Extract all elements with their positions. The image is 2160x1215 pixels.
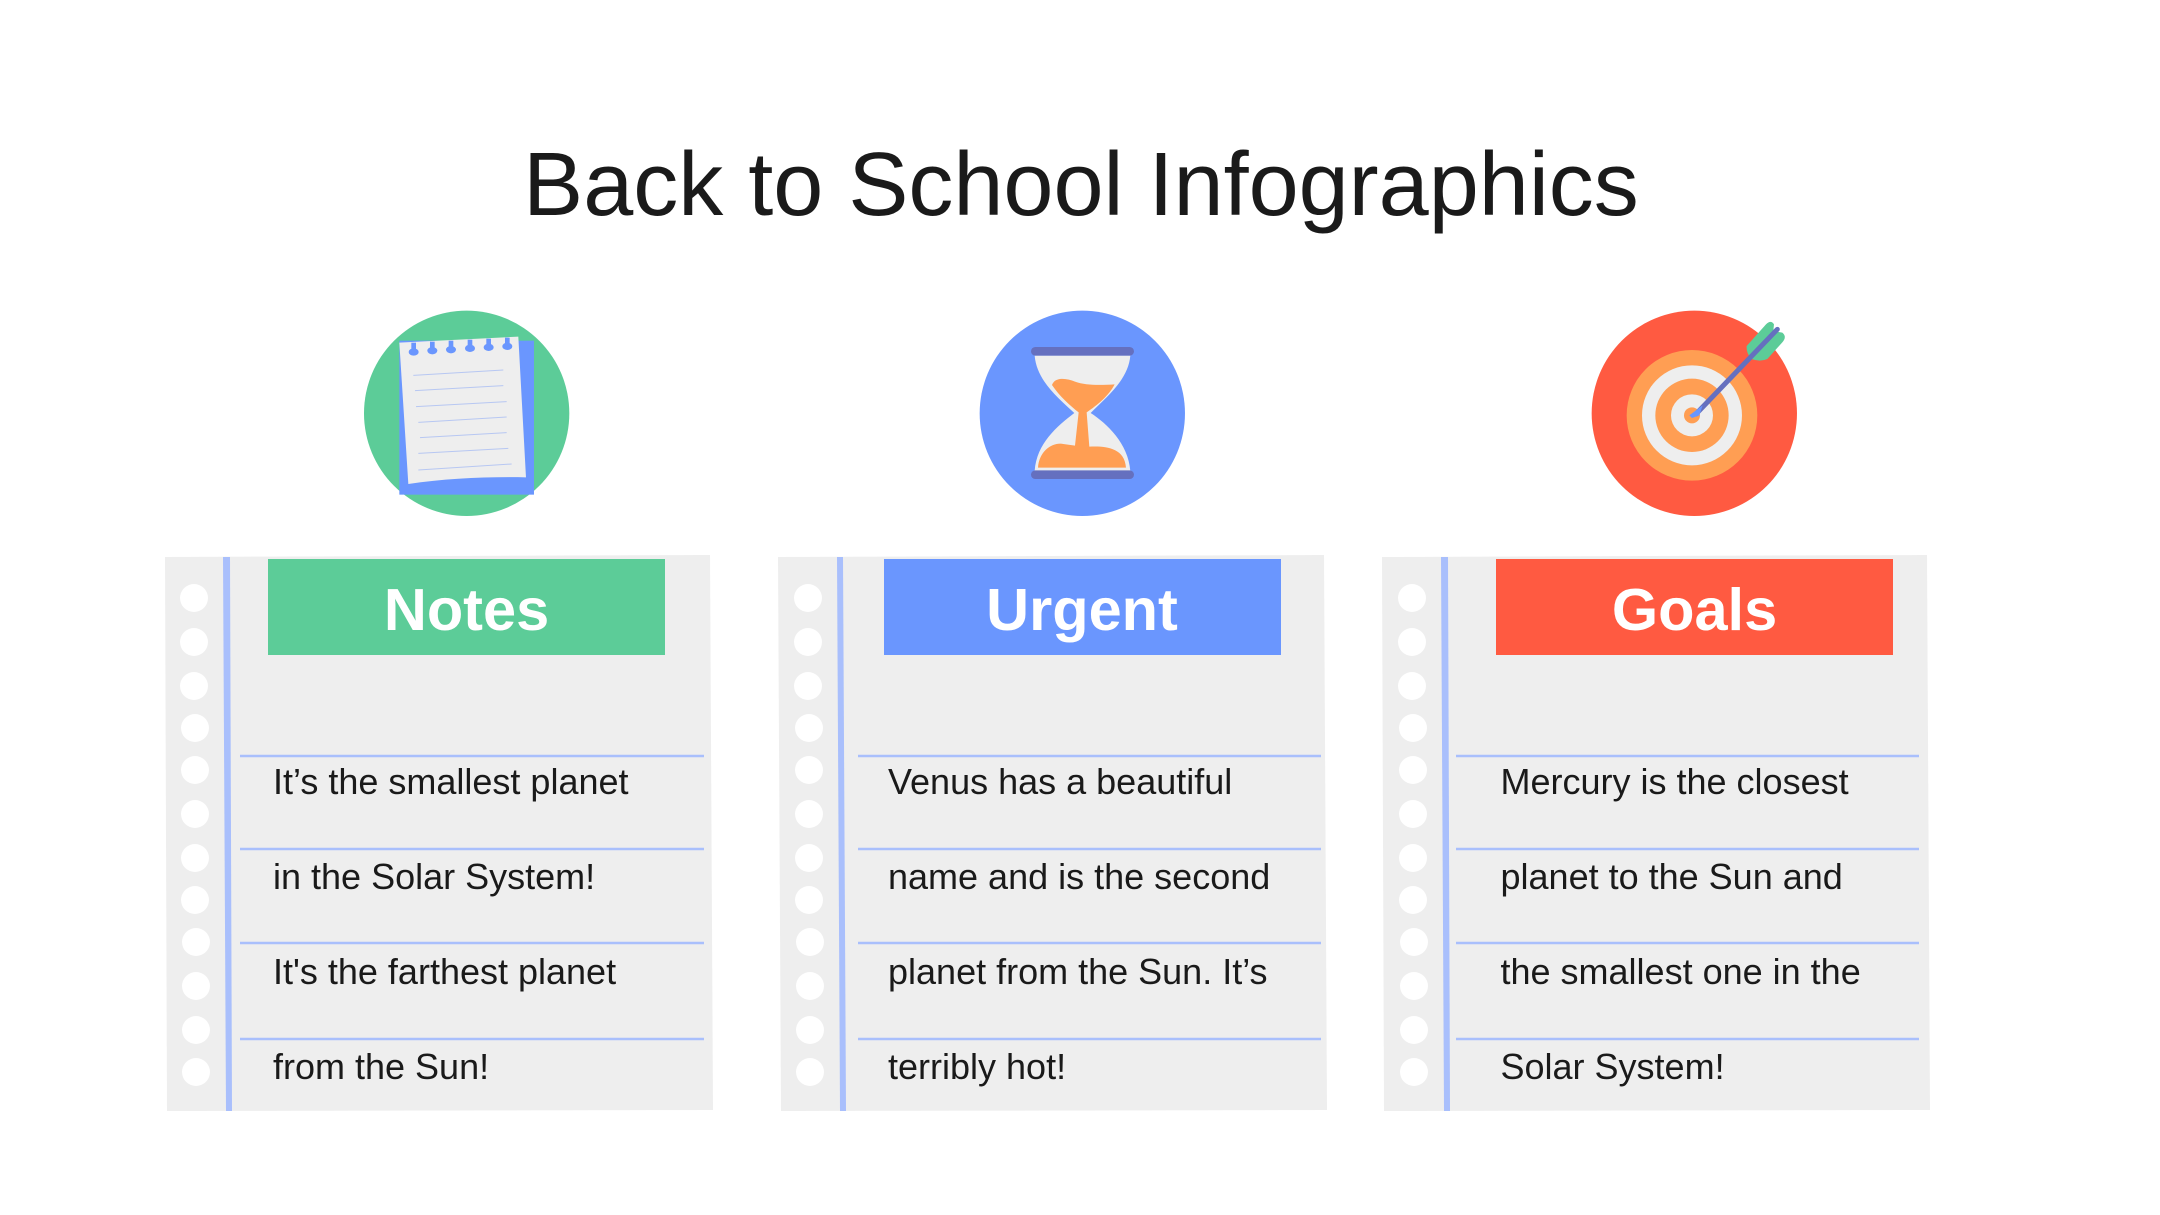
- text: goals body: Mercury is the closest: [1500, 761, 1849, 802]
- text: goals body: the smallest one in the: [1500, 951, 1861, 992]
- notebook paper: [778, 555, 1327, 1111]
- text: goals body: Solar System!: [1500, 1046, 1725, 1087]
- text: goals body: planet to the Sun and: [1500, 856, 1843, 897]
- text: urgent body: planet from the Sun. It’s: [888, 951, 1268, 992]
- text: notes body: It's the farthest planet: [273, 951, 616, 992]
- notebook paper: [1382, 555, 1930, 1111]
- notebook paper: [165, 555, 713, 1111]
- heading: urgent: Urgent: [986, 576, 1178, 643]
- icon: hourglass: [980, 311, 1185, 516]
- panel: goals: [1382, 311, 1930, 1111]
- text: urgent body: name and is the second: [888, 856, 1270, 897]
- text: notes body: It’s the smallest planet: [273, 761, 629, 802]
- icon: notepad: [364, 311, 569, 516]
- text: urgent body: Venus has a beautiful: [888, 761, 1232, 802]
- text: urgent body: terribly hot!: [888, 1046, 1066, 1087]
- panel: notes: [165, 311, 713, 1111]
- text: goals body: [1500, 761, 1861, 1087]
- icon: target with arrow: [1592, 311, 1797, 516]
- text: notes body: from the Sun!: [273, 1046, 489, 1087]
- panel: urgent: [778, 311, 1327, 1111]
- heading: urgent: [884, 559, 1281, 655]
- heading: goals: [1496, 559, 1893, 655]
- title: Back to School Infographics: [523, 135, 1639, 235]
- text: urgent body: [888, 761, 1270, 1087]
- text: notes body: in the Solar System!: [273, 856, 595, 897]
- text: notes body: [273, 761, 629, 1087]
- heading: goals: Goals: [1612, 576, 1777, 643]
- heading: notes: Notes: [384, 576, 549, 643]
- heading: notes: [268, 559, 665, 655]
